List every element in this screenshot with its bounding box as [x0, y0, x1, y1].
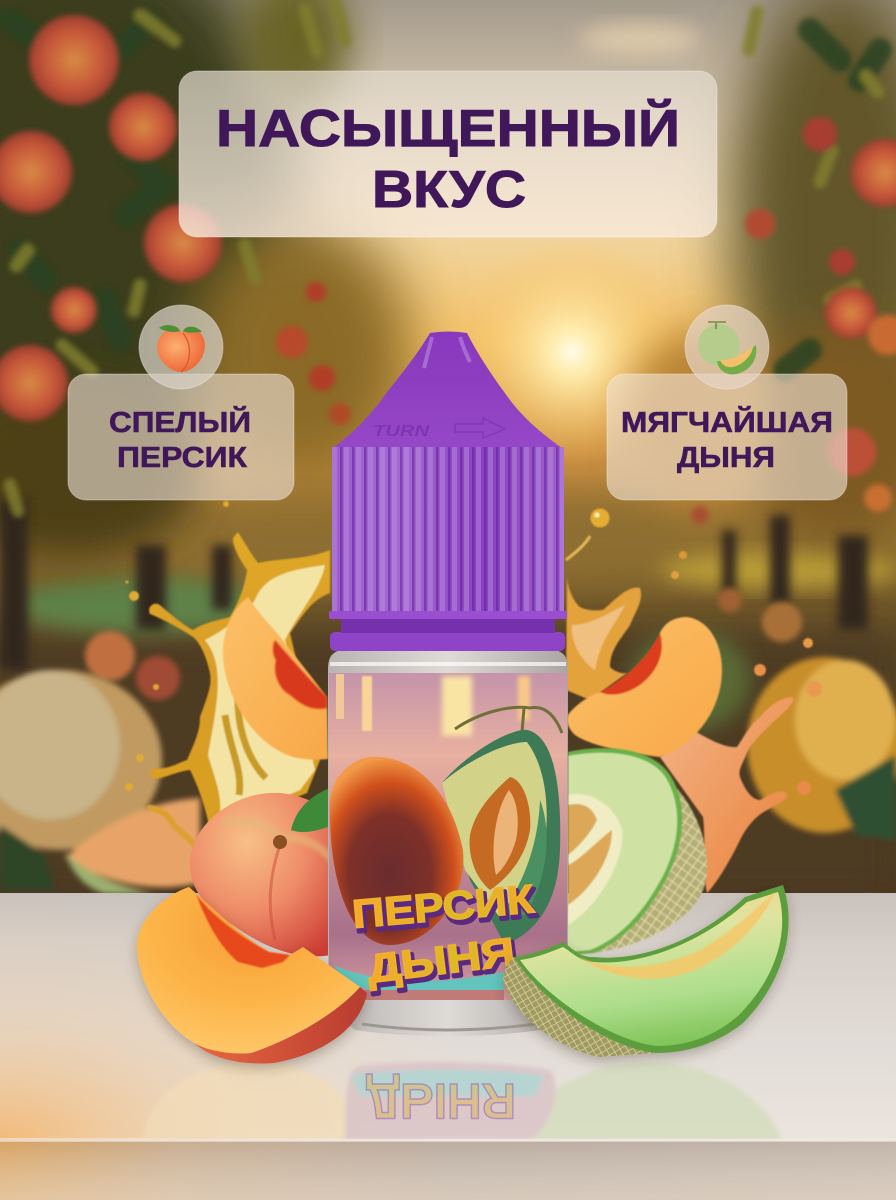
product name: ПЕРСИК — [351, 877, 536, 937]
tree foliage right — [630, 0, 896, 540]
label peach — [330, 757, 463, 945]
icon: cap arrow — [455, 418, 505, 438]
callout: soft melon — [607, 374, 847, 500]
label melon — [442, 730, 560, 945]
table reflection — [142, 1062, 782, 1140]
peach wedge foreground — [137, 887, 367, 1064]
liquid splash right — [566, 508, 822, 893]
tree foliage left — [0, 0, 410, 560]
peach wedge upper right — [567, 617, 722, 757]
melon half right — [568, 748, 707, 955]
title text — [216, 99, 680, 219]
leaves — [10, 5, 880, 511]
callout text: ДЫНЯ — [677, 442, 775, 474]
background: peach orchard at sunset — [0, 0, 896, 900]
trunks — [0, 500, 868, 670]
product label — [329, 673, 567, 1000]
bottle glass body — [328, 650, 568, 1036]
callout: ripe peach — [68, 374, 294, 500]
cap embossed text: TURN — [373, 423, 430, 440]
product name — [351, 877, 539, 996]
heading panel — [179, 71, 717, 237]
callout text: СПЕЛЫЙ — [109, 405, 251, 439]
table surface — [0, 893, 896, 1200]
title text: ВКУС — [372, 161, 526, 219]
callout text: ПЕРСИК — [117, 442, 247, 474]
product name: ПЕРСИК — [353, 881, 539, 941]
liquid splash left — [125, 501, 330, 856]
purple child-proof cap — [329, 332, 567, 651]
icon: melon badge — [685, 305, 769, 389]
orchard peaches — [0, 15, 896, 476]
callout text — [109, 405, 251, 474]
reflected label text: ДЫНЯ — [366, 1073, 516, 1129]
product name: ДЫНЯ — [367, 934, 520, 996]
label stripe — [333, 965, 504, 995]
bottle — [328, 332, 568, 1036]
title text: НАСЫЩЕННЫЙ — [216, 99, 680, 158]
icon: peach badge — [139, 305, 223, 389]
icon: peach leaf — [291, 788, 330, 832]
melon slice foreground — [503, 885, 789, 1057]
callout text — [621, 405, 833, 474]
whole peach left — [190, 788, 332, 956]
callout text: МЯГЧАЙШАЯ — [621, 405, 833, 439]
product name: ДЫНЯ — [365, 930, 517, 992]
peach wedge upper left — [223, 597, 328, 760]
melon stem — [455, 707, 562, 733]
melons in background — [0, 657, 896, 894]
